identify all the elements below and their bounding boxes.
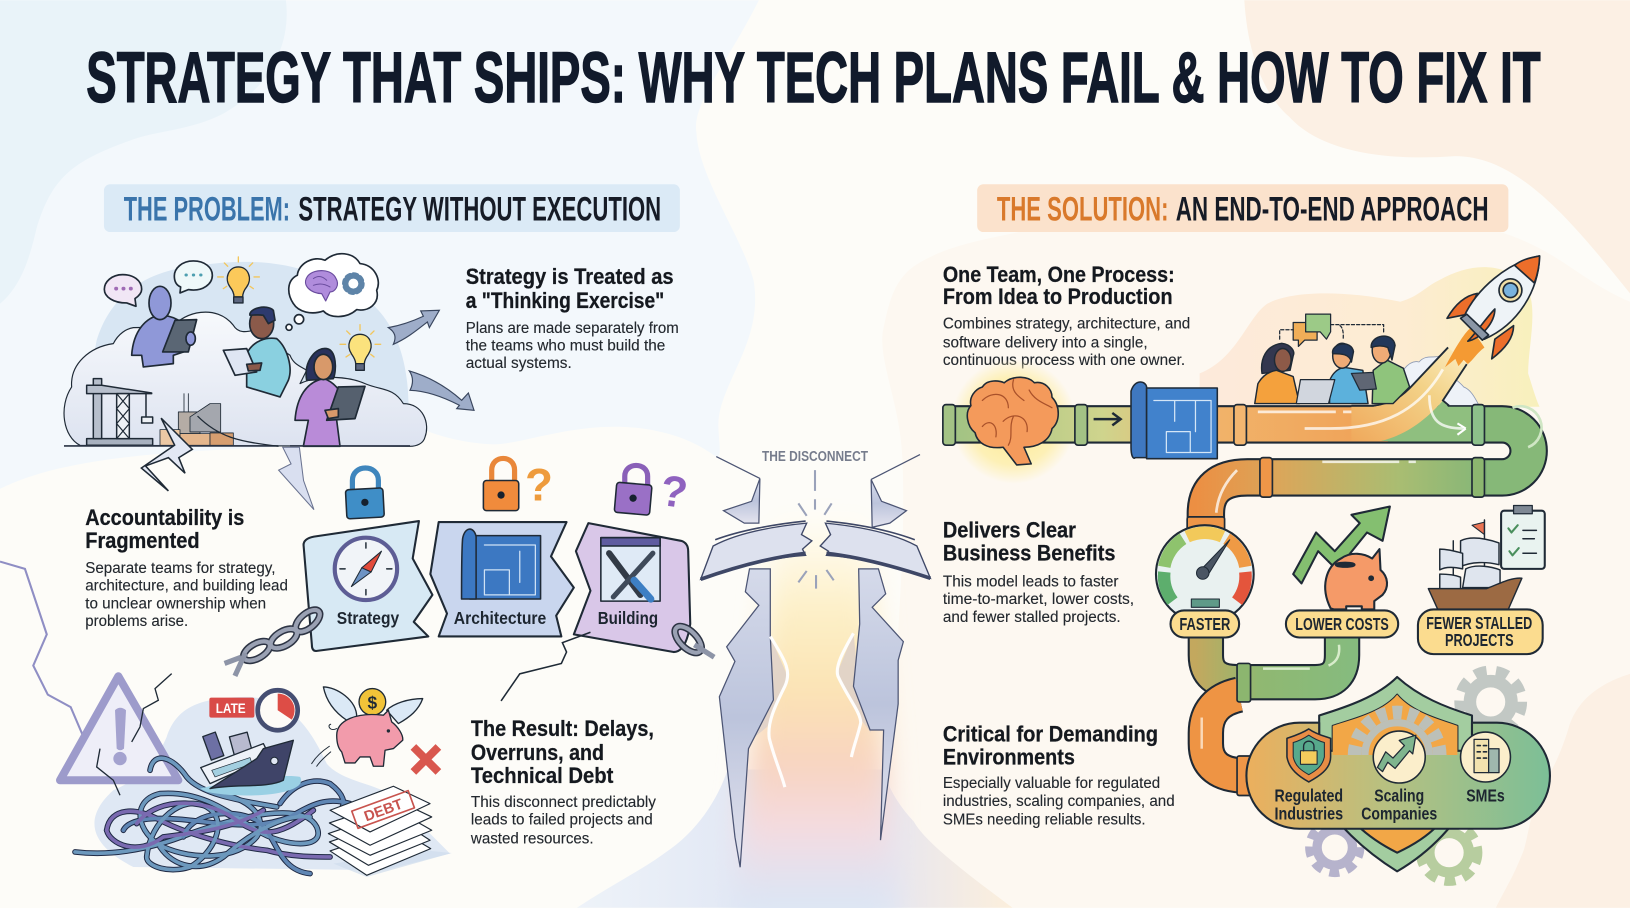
shield window inside capsule: [1333, 695, 1457, 755]
text block: critical for demanding environments: SMEs needing reliable results.: [943, 811, 1146, 829]
label: smes: SMEs: [1466, 786, 1505, 806]
pipe: first run: [944, 424, 1529, 532]
person: man in green: [1371, 336, 1410, 404]
text block: the result: Overruns, and: [471, 740, 604, 765]
text block: the result: wasted resources.: [470, 829, 594, 847]
arrow: down right: [409, 371, 474, 410]
icon: left broken chain: [225, 606, 324, 676]
swoosh to rocket: [1351, 347, 1481, 441]
icon: growth arrow: [1293, 506, 1390, 583]
icon: flying piggy bank: $: [368, 693, 378, 713]
shield: [1319, 677, 1472, 871]
speech bubble: purple: [104, 275, 142, 306]
icon: smes building circle: [1461, 732, 1510, 782]
gear: central: [1355, 712, 1440, 755]
icon: rocket: [1445, 256, 1540, 367]
text block: the result: This disconnect predictably: [471, 793, 657, 811]
text block: the result: [470, 716, 657, 847]
text block: the result: leads to failed projects and: [471, 811, 653, 829]
person: man in blue: [1330, 343, 1368, 404]
label: architecture: Architecture: [454, 608, 546, 628]
right bridge stub: [820, 521, 930, 578]
icon: red x: [413, 747, 438, 772]
left cliff: [716, 457, 773, 867]
text block: one team one process: One Team, One Process:: [943, 262, 1175, 287]
pipe highlights: [1216, 369, 1464, 513]
icon: scaling chart circle: [1373, 731, 1425, 783]
label: regulated industries: Regulated: [1274, 786, 1343, 806]
text block: accountability is fragmented: to unclear ownership when: [85, 594, 266, 612]
clouds behind swoosh: [1393, 356, 1480, 408]
fracture burst: [798, 470, 834, 589]
right cliff: [853, 455, 920, 840]
illustration: demanding environments capsule: [1246, 673, 1550, 880]
text block: critical for demanding environments: [943, 721, 1175, 829]
icon: sinking ship: [200, 732, 301, 796]
arrow: up right: [388, 310, 439, 344]
text block: delivers clear business benefits: time-to-market, lower costs,: [943, 590, 1134, 608]
person: thinking figure two: [223, 307, 290, 397]
chasm glow: [733, 520, 896, 908]
label: lower costs: LOWER COSTS: [1295, 614, 1389, 634]
label: scaling companies: [1361, 786, 1437, 823]
illustration: strategy team in the clouds: [64, 254, 474, 446]
section heading: the problem: STRATEGY WITHOUT EXECUTION: [298, 191, 661, 229]
text block: critical for demanding environments: Critical for Demanding: [943, 721, 1158, 746]
icon: right broken chain: [671, 622, 714, 657]
text block: strategy is treated as a thinking exercise: actual systems.: [466, 354, 572, 372]
arrow inside pipe: [1094, 413, 1121, 425]
icon: purple lock with question mark: [614, 465, 691, 518]
capsule: [1246, 723, 1550, 829]
label: fewer stalled projects: FEWER STALLED: [1426, 613, 1532, 633]
icon: flying piggy bank: [312, 687, 423, 766]
panel: strategy: [304, 521, 432, 651]
icon: light bulb two: [340, 325, 381, 370]
section heading: the solution: THE SOLUTION:: [997, 191, 1168, 229]
label: regulated industries: [1274, 786, 1343, 823]
icon: crane: [87, 379, 153, 445]
speech bubble: teal: [174, 261, 212, 293]
text block: delivers clear business benefits: Business Benefits: [943, 541, 1115, 566]
team members: [1255, 314, 1410, 404]
text block: critical for demanding environments: Environments: [943, 744, 1075, 769]
label: fewer stalled projects: [1418, 609, 1543, 654]
icon: late tag and clock: [209, 690, 298, 730]
label: scaling companies: Companies: [1361, 803, 1437, 823]
label: scaling companies: Scaling: [1374, 786, 1424, 806]
text block: accountability is fragmented: Accountability is: [85, 505, 244, 530]
label: faster: [1171, 610, 1239, 637]
ground line: [64, 443, 410, 448]
text block: one team one process: Combines strategy, architecture, and: [943, 315, 1190, 333]
pipe: second run: [1206, 477, 1487, 532]
label: fewer stalled projects: PROJECTS: [1445, 630, 1514, 650]
section heading: the problem: THE PROBLEM:: [124, 191, 290, 229]
label: faster: FASTER: [1179, 614, 1231, 634]
text block: accountability is fragmented: problems arise.: [85, 612, 188, 630]
icon: blueprint: [1131, 382, 1217, 459]
label: building: Building: [598, 608, 658, 628]
icon: purple lock with question mark: ?: [657, 466, 691, 518]
text block: critical for demanding environments: industries, scaling companies, and: [943, 792, 1175, 810]
icon: blueprint: [462, 529, 541, 599]
text block: strategy is treated as a thinking exercise: the teams who must build the: [466, 337, 665, 355]
icon: speedometer: [1156, 525, 1254, 623]
glow behind brain: [951, 359, 1076, 484]
text block: the result: The Result: Delays,: [471, 716, 654, 741]
gear: purple: [1311, 824, 1359, 871]
text block: one team one process: continuous process with one owner.: [943, 351, 1185, 369]
person: woman: [1255, 343, 1299, 404]
panel: architecture: [430, 522, 574, 636]
label: strategy: Strategy: [337, 608, 400, 628]
person: thinking figure three: [295, 348, 365, 446]
gear: grey: [1462, 673, 1520, 731]
text block: strategy is treated as a thinking exercise: Plans are made separately from: [466, 319, 679, 337]
icon: window with tools: [601, 538, 660, 601]
text block: delivers clear business benefits: This model leads to faster: [943, 573, 1119, 591]
icon: compass: [335, 538, 397, 600]
blob behind team and rocket: [1200, 267, 1540, 407]
text block: strategy is treated as a thinking exercise: a "Thinking Exercise": [466, 288, 664, 313]
text block: the result: Technical Debt: [471, 763, 614, 788]
illustration: business benefits pipeline: [1156, 505, 1545, 795]
left bridge stub: [701, 521, 812, 579]
section heading: the solution: [977, 184, 1508, 232]
text block: one team one process: From Idea to Production: [943, 284, 1173, 309]
text block: one team one process: [943, 262, 1190, 369]
icon: brain: [967, 377, 1058, 465]
tablet: [1351, 372, 1376, 390]
icon: factory and boxes: [160, 394, 233, 445]
text block: accountability is fragmented: Separate teams for strategy,: [85, 559, 275, 577]
crevice shadows: [751, 633, 871, 740]
pipe: benefits connector: [1206, 634, 1342, 682]
pipe flanges: [1187, 517, 1252, 795]
icon: blue lock: [345, 468, 384, 519]
pipe flanges: [943, 405, 1484, 497]
text block: delivers clear business benefits: [943, 518, 1134, 626]
icon: orange lock with question mark: ?: [525, 459, 553, 510]
icon: regulated shield: [1287, 729, 1331, 782]
icon: sailing ship: [1428, 520, 1522, 616]
text block: strategy is treated as a thinking exercise: Strategy is Treated as: [466, 264, 674, 289]
text block: accountability is fragmented: architecture, and building lead: [85, 577, 288, 595]
cracks under the clouds: [141, 416, 314, 510]
section heading: the problem: [104, 184, 680, 232]
icon: thought cloud with brain and gear: [286, 254, 378, 330]
person: thinking figure one: [132, 286, 197, 367]
icon: warning triangle: [60, 674, 178, 795]
illustration: the result: [60, 674, 452, 877]
icon: light bulb one: [218, 257, 259, 303]
text block: delivers clear business benefits: Delivers Clear: [943, 518, 1076, 543]
label: regulated industries: Industries: [1274, 803, 1343, 823]
chat bubbles: [1280, 314, 1384, 346]
laptop: [1296, 380, 1335, 404]
text block: accountability is fragmented: Fragmented: [85, 528, 200, 553]
icon: debt paper stack: [328, 786, 452, 877]
illustration: fragmented accountability panels: [225, 458, 714, 676]
crevice highlights: [769, 633, 861, 787]
icon: orange piggy bank: [1325, 549, 1387, 609]
icon: orange lock with question mark: [483, 458, 553, 511]
label: lower costs: [1286, 610, 1398, 637]
text block: critical for demanding environments: Especially valuable for regulated: [943, 774, 1160, 792]
text block: delivers clear business benefits: and fewer stalled projects.: [943, 608, 1121, 626]
icon: clipboard: [1501, 505, 1545, 569]
text block: one team one process: software delivery into a single,: [943, 333, 1148, 351]
label: the disconnect: THE DISCONNECT: [762, 448, 869, 465]
illustration: pipeline from idea to production: [943, 256, 1542, 532]
panel: building: [574, 523, 690, 652]
gear: green: [1422, 826, 1476, 880]
icon: late tag and clock: LATE: [216, 700, 246, 716]
illustration: chasm cliffs and broken bridge: [701, 455, 930, 867]
text block: strategy is treated as a thinking exercise: [466, 264, 679, 372]
illustration: cracks: [0, 562, 590, 736]
pipe: down to capsule: [1202, 695, 1247, 776]
icon: tangled wires: [75, 758, 350, 874]
text block: accountability is fragmented: [85, 505, 288, 630]
icon: debt paper stack: DEBT: [362, 797, 405, 825]
